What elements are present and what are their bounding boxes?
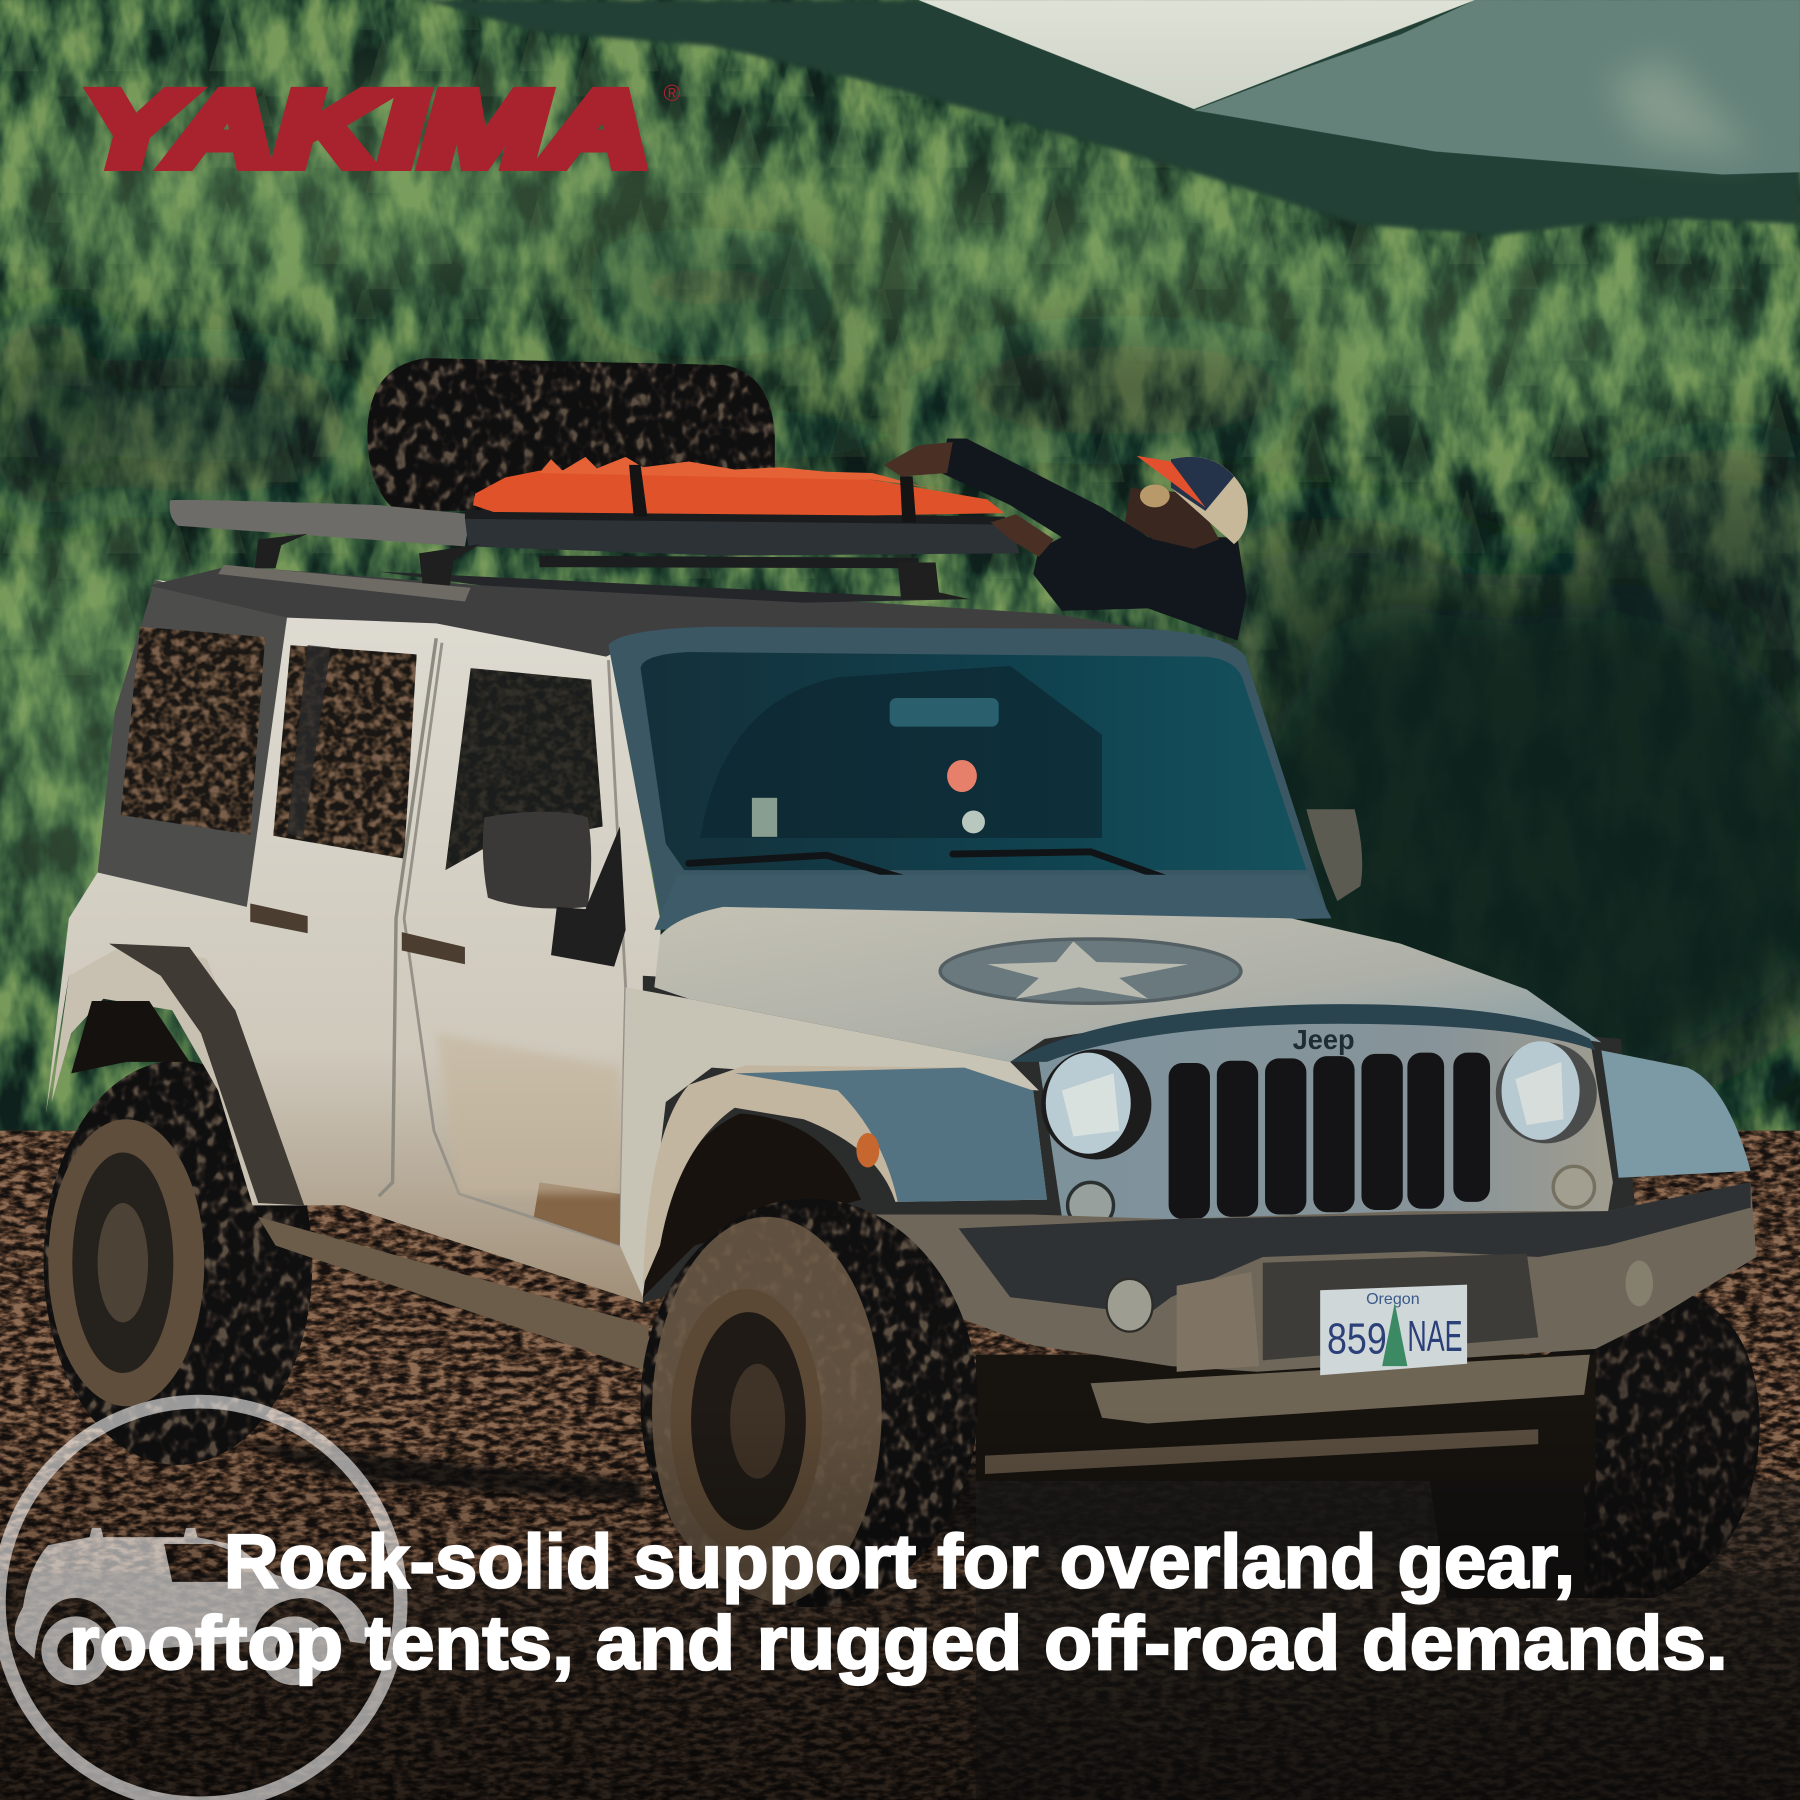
spare tire on roof xyxy=(362,350,781,517)
hood lip xyxy=(1010,1004,1596,1062)
registered mark: ® xyxy=(664,80,681,106)
right mirror xyxy=(1306,809,1362,901)
side mirror xyxy=(483,812,591,908)
lower door mud xyxy=(436,1033,620,1194)
signal lamps xyxy=(1068,1182,1114,1228)
forest streaks xyxy=(0,0,1800,1131)
license plate xyxy=(1320,1285,1467,1375)
logo: Yakima xyxy=(83,70,681,188)
rack deck line xyxy=(465,510,1010,525)
front fender xyxy=(643,1065,1047,1286)
middle window mud xyxy=(273,645,417,858)
rack lower rail xyxy=(540,556,918,568)
face xyxy=(1125,488,1219,549)
cowl xyxy=(654,875,1332,930)
bumper xyxy=(872,1182,1756,1372)
wheel well rear xyxy=(71,1001,189,1073)
chassis xyxy=(976,1355,1596,1481)
icon vehicle xyxy=(15,1528,370,1685)
cool darker foreground xyxy=(976,1481,1800,1800)
rack front side xyxy=(465,519,1019,556)
hood xyxy=(654,907,1601,1062)
license plate: Oregon xyxy=(1366,1290,1420,1308)
mountain highlight xyxy=(1607,57,1756,155)
cap brim xyxy=(1136,456,1205,507)
rack legs xyxy=(255,534,970,599)
door handle rear xyxy=(250,903,308,933)
bumper recess xyxy=(1263,1254,1538,1360)
license plate: 859 xyxy=(1327,1315,1387,1363)
shadow front xyxy=(849,1435,1676,1573)
ground: gravel xyxy=(0,1131,1800,1800)
vehicle: off-road jeep xyxy=(34,565,1768,1613)
photo background: mountain forest xyxy=(0,0,1800,1159)
rear fender flare xyxy=(109,944,304,1205)
door seam xyxy=(379,638,436,1196)
windshield frame xyxy=(608,627,1326,913)
front end backing xyxy=(643,976,1636,1303)
logo: Yakima: YAKIMA xyxy=(83,70,650,188)
fender blue section xyxy=(735,1068,1047,1202)
broad light band xyxy=(0,92,1779,987)
cap front navy xyxy=(1171,457,1234,511)
hood star roundel xyxy=(940,939,1241,1003)
interior shapes xyxy=(700,666,1102,838)
roof rail slots xyxy=(379,572,964,603)
rack platform top xyxy=(169,500,471,546)
fender marker xyxy=(856,1133,879,1167)
license plate: NAE xyxy=(1407,1313,1463,1361)
bumper mud patch xyxy=(1177,1272,1259,1372)
board teeth xyxy=(540,457,976,494)
caption text xyxy=(69,1520,1728,1686)
dashboard gauge xyxy=(962,810,985,833)
lower body side xyxy=(52,944,304,1205)
rear window mud xyxy=(120,626,265,834)
grille face xyxy=(1039,1019,1613,1234)
sky xyxy=(918,0,1475,109)
sun visor xyxy=(890,698,999,727)
bumper dark band xyxy=(959,1182,1751,1314)
right fender xyxy=(1601,1050,1751,1178)
Jeep badge: Jeep xyxy=(1293,1024,1355,1055)
hanging charm xyxy=(947,760,977,792)
plate tree xyxy=(1382,1303,1407,1366)
right headlight xyxy=(1496,1041,1597,1143)
gravel texture xyxy=(0,1130,1800,1800)
roof rails xyxy=(218,565,471,602)
hardtop rear section xyxy=(98,580,287,907)
hood star xyxy=(987,941,1188,999)
door handle front xyxy=(402,932,465,964)
recovery board orange xyxy=(473,468,1004,515)
grille slots xyxy=(1169,1053,1490,1219)
caption line 1: Rock-solid support for overland gear, xyxy=(224,1520,1575,1605)
front tire xyxy=(631,1194,987,1613)
shadow under the vehicle xyxy=(230,1441,643,1504)
door seam front xyxy=(404,643,626,1246)
cap crown xyxy=(1171,457,1248,544)
icon ring xyxy=(0,1402,401,1800)
forest base xyxy=(0,0,1800,1159)
right front tire xyxy=(1430,1296,1760,1598)
far dark ridge xyxy=(425,0,1800,235)
left headlight xyxy=(1041,1049,1151,1159)
tree tops xyxy=(0,0,1800,712)
windshield glass xyxy=(641,652,1306,870)
dashboard light item xyxy=(752,798,777,837)
suspension mud xyxy=(1091,1355,1590,1423)
foreground shading xyxy=(0,1573,1800,1800)
hands xyxy=(884,442,1054,557)
body side xyxy=(46,580,666,1303)
running board and underbody xyxy=(258,1217,649,1372)
icon: vehicle in circle xyxy=(0,1402,401,1800)
sunglasses xyxy=(1140,484,1170,507)
bottom shade xyxy=(0,1412,1800,1800)
door mud stain xyxy=(534,1182,620,1246)
rear tire xyxy=(34,1056,321,1469)
roof xyxy=(149,566,1240,657)
distant mountain xyxy=(1194,0,1800,174)
person xyxy=(884,439,1248,641)
front wheel well xyxy=(643,1114,861,1297)
front door window xyxy=(442,666,608,878)
caption line 2: rooftop tents, and rugged off-road demands. xyxy=(69,1601,1728,1686)
side body panel below hood xyxy=(620,987,1039,1297)
straps xyxy=(629,465,916,522)
jacket xyxy=(941,439,1247,641)
right fog lamp xyxy=(1626,1260,1653,1306)
window pillar xyxy=(287,645,331,838)
right signal lamp xyxy=(1553,1166,1595,1208)
steering bar xyxy=(985,1429,1538,1474)
dark forest shadows xyxy=(0,255,1800,1125)
roof rack with cargo xyxy=(169,350,1248,641)
mirror arm xyxy=(551,827,626,967)
wiper blades xyxy=(689,852,1215,900)
fog lamp xyxy=(1107,1279,1153,1332)
